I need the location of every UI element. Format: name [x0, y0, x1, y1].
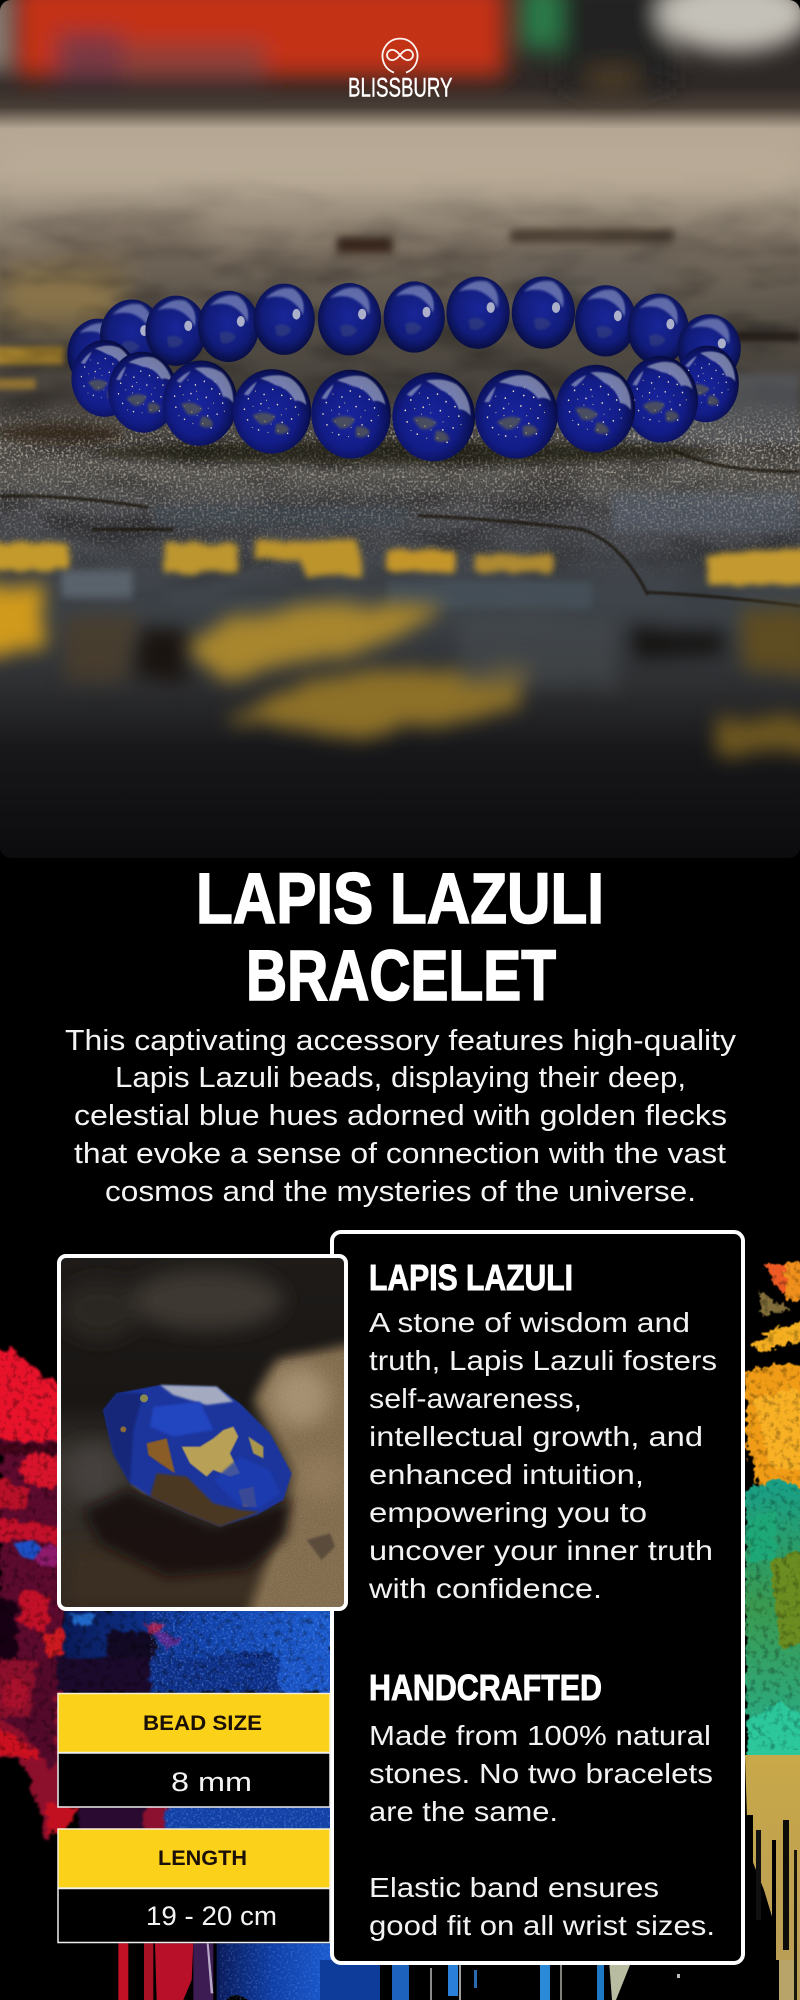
title: BRACELET	[246, 937, 556, 1016]
paint splash: orange, teal and yellow pigment on right	[745, 1260, 800, 2000]
hero photo: lapis lazuli bracelet on stone	[0, 0, 800, 860]
title: LAPIS LAZULI	[196, 860, 604, 939]
text: stone meaning: self-awareness,	[369, 1383, 582, 1414]
value: 19 - 20 cm: 19 - 20 cm	[146, 1901, 277, 1931]
label: length	[58, 1829, 330, 1888]
spec table: length	[58, 1829, 330, 1942]
text: stone meaning: A stone of wisdom and	[369, 1307, 690, 1338]
text: stone meaning: truth, Lapis Lazuli fosters	[369, 1345, 717, 1376]
intro paragraph	[65, 1025, 737, 1208]
slate patches	[61, 373, 800, 609]
brand logo	[348, 39, 452, 102]
text: handcrafted details: good fit on all wrist sizes.	[369, 1910, 715, 1941]
heading: handcrafted: HANDCRAFTED	[369, 1667, 602, 1708]
text: handcrafted details: stones. No two bracelets	[369, 1758, 713, 1789]
heading: lapis lazuli: LAPIS LAZULI	[369, 1257, 573, 1298]
intro paragraph: This captivating accessory features high-quality	[65, 1025, 737, 1057]
text: stone meaning: with confidence.	[368, 1573, 602, 1604]
spec table: bead size	[58, 1694, 330, 1807]
panel: stone photo	[57, 1253, 353, 1617]
brand name: BLISSBURY	[348, 72, 452, 102]
ground mottling	[0, 188, 800, 579]
text: handcrafted details: Made from 100% natural	[369, 1720, 711, 1751]
value: 19 - 20 cm	[58, 1888, 330, 1942]
intro paragraph: that evoke a sense of connection with the vast	[74, 1138, 726, 1170]
label: length: LENGTH	[158, 1847, 247, 1870]
label: bead size: BEAD SIZE	[143, 1712, 262, 1735]
text: handcrafted details: are the same.	[369, 1796, 558, 1827]
text: handcrafted details	[369, 1720, 715, 1941]
intro paragraph: cosmos and the mysteries of the universe.	[105, 1176, 696, 1208]
value: 8 mm: 8 mm	[171, 1767, 252, 1797]
bracelet back row	[67, 276, 742, 467]
text: stone meaning: enhanced intuition,	[369, 1459, 644, 1490]
text: stone meaning: empowering you to	[369, 1497, 647, 1528]
value: 8 mm	[58, 1753, 330, 1807]
title	[196, 860, 604, 1016]
ground speckle	[0, 400, 800, 580]
panel: description	[332, 1232, 743, 1963]
bracelet front row	[71, 340, 130, 417]
icon: infinity ring	[382, 39, 418, 73]
text: handcrafted details: Elastic band ensures	[369, 1872, 659, 1903]
paint splash: red, purple and blue pigment on left	[0, 1340, 335, 2000]
intro paragraph: Lapis Lazuli beads, displaying their deep,	[115, 1062, 686, 1094]
icon: raw lapis stone	[103, 1385, 292, 1527]
label: bead size	[58, 1694, 330, 1752]
intro paragraph: celestial blue hues adorned with golden flecks	[74, 1100, 727, 1132]
pigment grain	[0, 1340, 335, 2000]
text: stone meaning: uncover your inner truth	[369, 1535, 713, 1566]
text: stone meaning	[368, 1307, 717, 1604]
bracelet shadow	[87, 440, 719, 465]
paint drips: bottom centre and right	[320, 1950, 797, 2000]
text: stone meaning: intellectual growth, and	[369, 1421, 703, 1452]
